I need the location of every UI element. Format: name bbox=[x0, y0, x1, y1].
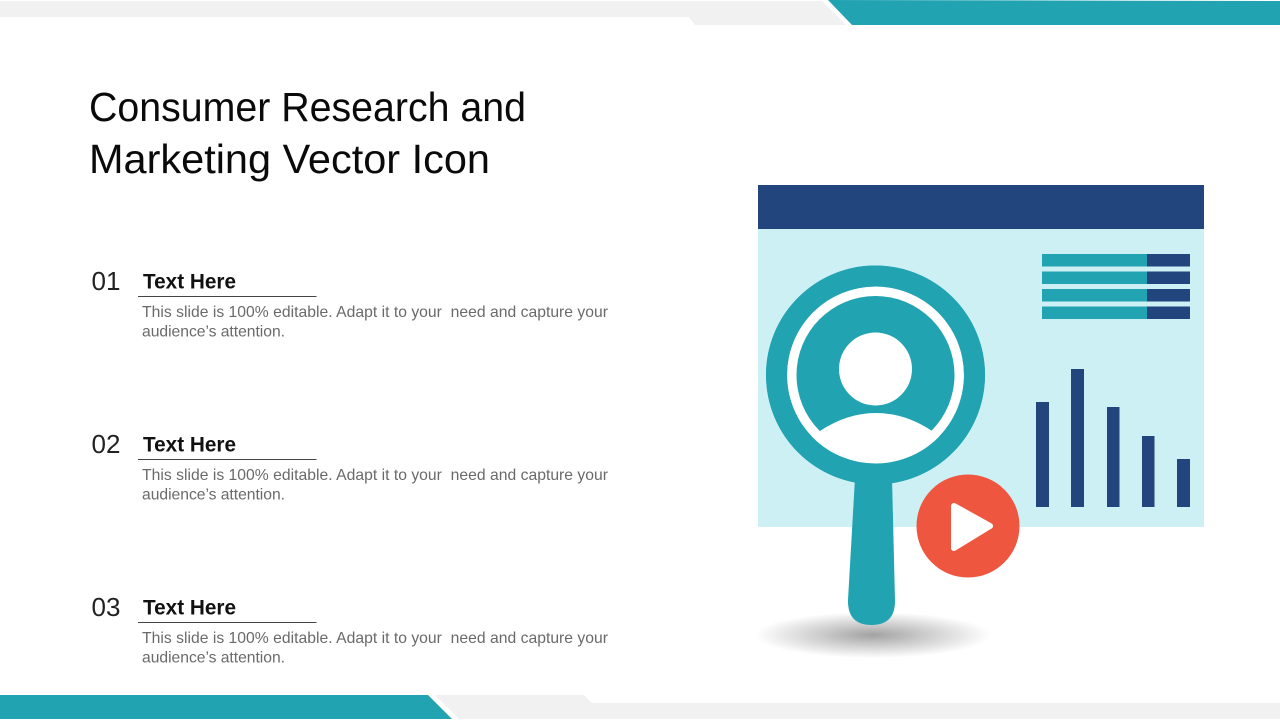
browser window illustration bbox=[758, 185, 1204, 527]
window body bbox=[758, 229, 1204, 527]
item 01: 01 bbox=[92, 266, 120, 296]
item 02: 02 bbox=[92, 429, 120, 459]
item 03: 03 bbox=[92, 592, 120, 622]
item 03 bbox=[92, 592, 608, 666]
window header bar bbox=[758, 185, 1204, 229]
item 01: Text Here bbox=[143, 270, 236, 294]
item 02: audience’s attention. bbox=[142, 486, 285, 504]
item 03: audience’s attention. bbox=[142, 650, 285, 666]
item 03: This slide is 100% editable. Adapt it to your need and capture your bbox=[142, 630, 608, 647]
item 02: Text Here bbox=[143, 434, 236, 456]
icon: magnifier shadow bbox=[755, 612, 991, 658]
bottom decorative band bbox=[0, 695, 1280, 719]
item 03: Text Here bbox=[143, 596, 236, 620]
item 01 bbox=[92, 266, 608, 340]
top decorative band bbox=[0, 0, 1280, 25]
icon: magnifying glass with user bbox=[766, 266, 985, 625]
title: Consumer Research and bbox=[89, 84, 526, 130]
item 02: This slide is 100% editable. Adapt it to your need and capture your bbox=[142, 467, 608, 484]
title: Marketing Vector Icon bbox=[89, 136, 490, 182]
item 02 bbox=[92, 429, 608, 504]
icon: play button bbox=[916, 474, 1020, 578]
item 01: This slide is 100% editable. Adapt it to your need and capture your bbox=[142, 304, 608, 321]
title bbox=[89, 84, 526, 182]
bar chart bbox=[1036, 369, 1190, 507]
item 01: audience’s attention. bbox=[142, 324, 285, 340]
list rows bbox=[1042, 254, 1190, 319]
